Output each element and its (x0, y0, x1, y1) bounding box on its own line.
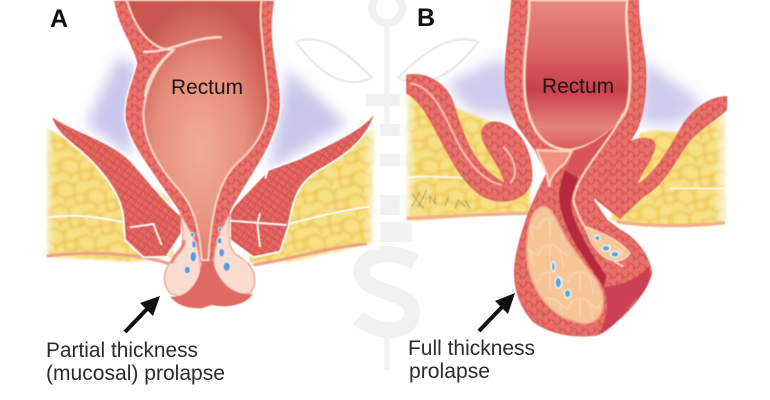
caption A: Partial thickness (46, 339, 198, 362)
prolapsed mucosa A (165, 213, 255, 297)
rectal wall A (113, 0, 281, 263)
fold A (143, 37, 222, 97)
artist mark (412, 190, 470, 208)
panel A: partial thickness prolapse (40, 0, 380, 385)
caption B: Full thickness (408, 337, 535, 360)
skin strips A (47, 244, 367, 265)
seam B (537, 150, 572, 187)
orange mucosa left B (527, 207, 603, 323)
caption A: (mucosal) prolapse (46, 362, 225, 385)
label B: B (417, 4, 435, 32)
levator left B (407, 74, 532, 201)
label A: A (50, 5, 68, 33)
prolapse right lip B (598, 267, 650, 335)
skin strips B (407, 213, 725, 226)
veins A (184, 227, 230, 274)
fat left A (47, 128, 173, 262)
orange mucosa right B (587, 227, 630, 261)
levator muscle right (230, 110, 377, 257)
fat right B (610, 113, 727, 227)
label rectum B: Rectum (542, 75, 614, 98)
shadow tissue B (447, 57, 703, 125)
watermark: caduceus emblem (296, 0, 478, 370)
arrow B (479, 293, 515, 331)
rectal tube B (505, 0, 652, 336)
muscle gaps (130, 172, 287, 247)
caption B: prolapse (409, 360, 490, 383)
fat left B (407, 90, 530, 221)
prolapse tip A (170, 262, 253, 308)
levator muscle left (51, 115, 182, 257)
illustration B (400, 0, 730, 336)
illustration A (40, 0, 380, 308)
wedge B (563, 117, 622, 180)
lumen A (127, 0, 268, 260)
veins B (551, 235, 619, 298)
shadow tissue A (87, 57, 347, 170)
lumen B (524, 0, 630, 150)
canal B (559, 170, 607, 287)
levator right B (593, 97, 727, 218)
label rectum A: Rectum (171, 76, 243, 99)
panel B: full thickness prolapse (400, 0, 730, 383)
arrow A (125, 296, 160, 332)
fat right A (243, 128, 375, 263)
